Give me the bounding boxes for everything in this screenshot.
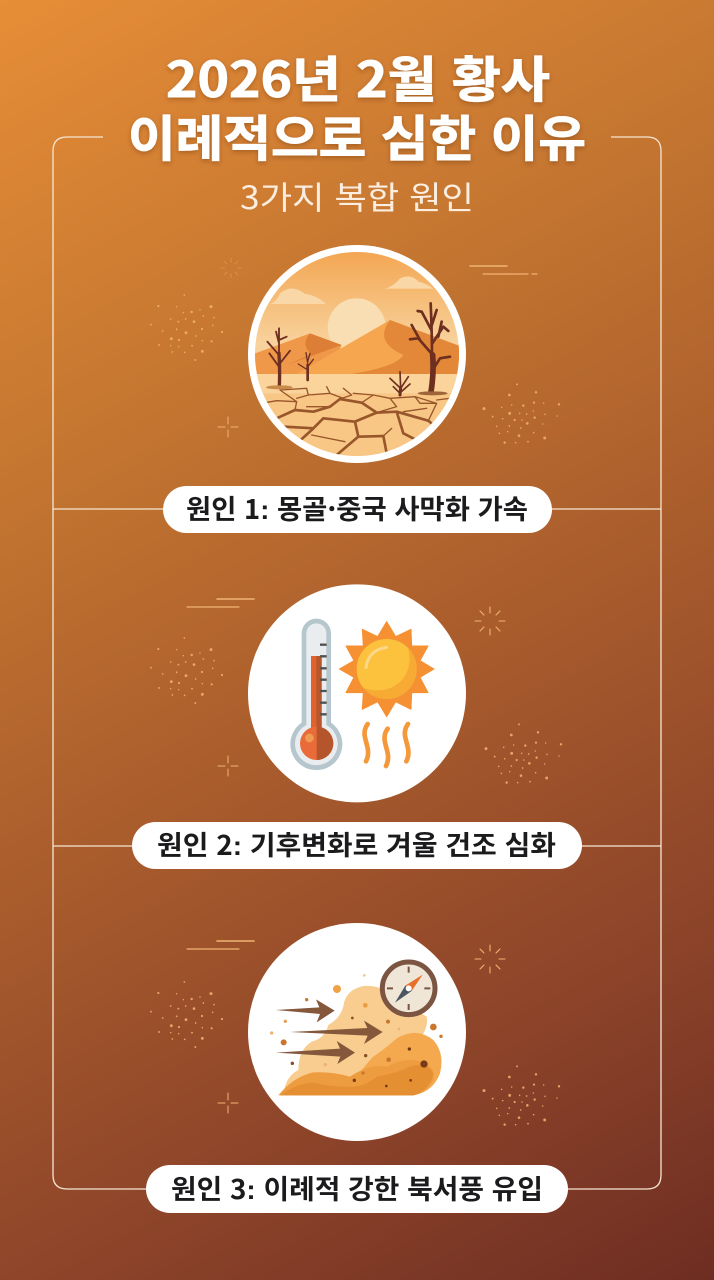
title: 이례적으로 심한 이유 (128, 100, 586, 171)
illustration: thermometer and sun (248, 584, 466, 802)
dust cloud (283, 986, 427, 1095)
pill 3 (146, 1165, 568, 1213)
sun (339, 622, 434, 717)
section 2 decorations (150, 599, 562, 783)
frame outline (53, 137, 661, 1189)
pill 3: 원인 3: 이례적 강한 북서풍 유입 (171, 1168, 543, 1207)
title (128, 41, 586, 171)
sun (328, 298, 386, 349)
compass (382, 962, 435, 1015)
section 3 decorations (150, 941, 560, 1125)
pill 1: 원인 1: 몽골·중국 사막화 가속 (186, 488, 528, 527)
dust particles (270, 974, 443, 1087)
thermometer (290, 619, 342, 770)
pill 2: 원인 2: 기후변화로 겨울 건조 심화 (157, 824, 556, 863)
heat waves (364, 724, 408, 766)
dead trees (267, 303, 450, 395)
cracks (262, 387, 450, 455)
illustration: desert circle (248, 245, 467, 467)
title: 2026년 2월 황사 (166, 41, 550, 112)
subtitle: 3가지 복합 원인 (240, 173, 474, 219)
illustration: dust cloud, arrows and compass (248, 923, 466, 1141)
arrows (276, 999, 383, 1064)
section 1 decorations (150, 258, 560, 443)
